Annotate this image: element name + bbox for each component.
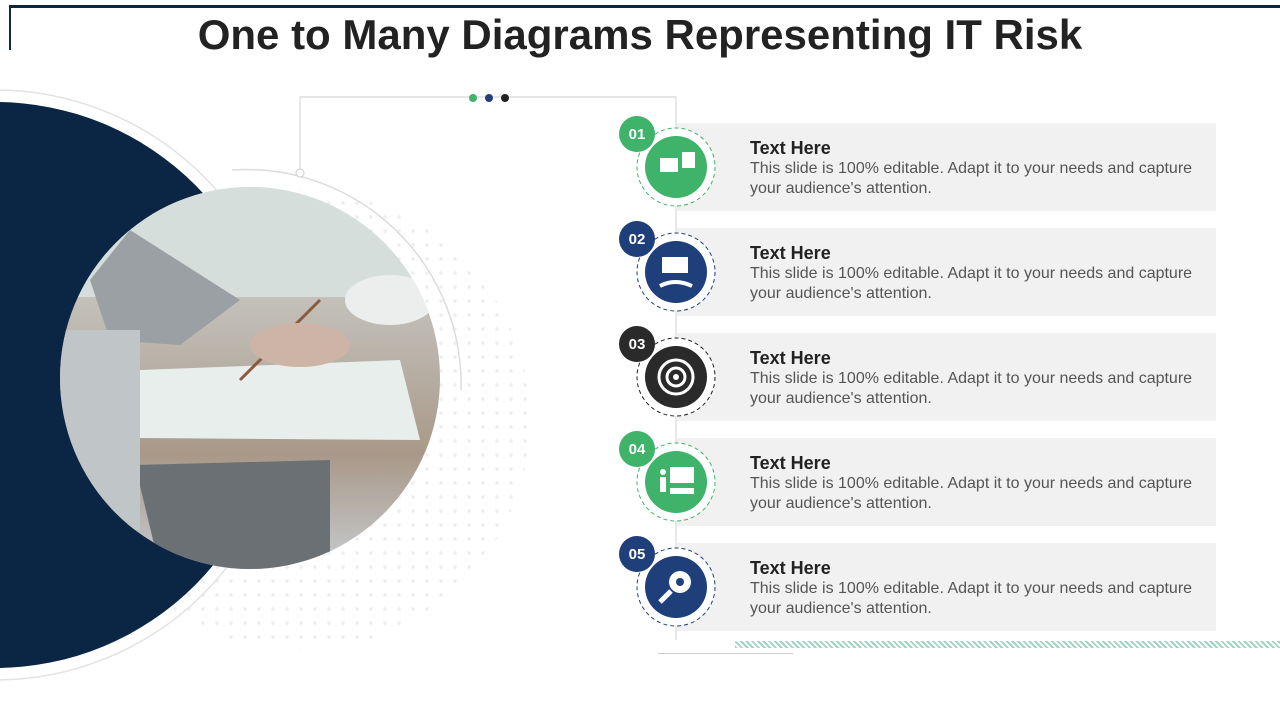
rows: Text Here — [750, 138, 831, 158]
title: One to Many Diagrams Representing IT Risk — [198, 11, 1082, 58]
rows — [677, 123, 1216, 211]
icon 3: 03 — [629, 336, 645, 353]
text: Text Here — [750, 558, 831, 578]
icon 3 — [619, 326, 715, 416]
left graphic — [0, 89, 676, 681]
text: This slide is 100% editable. Adapt it to your needs and capture your audience's attention. — [750, 370, 1192, 407]
icon 2 — [619, 221, 715, 311]
navy circle — [0, 102, 278, 668]
icon 2: 02 — [629, 231, 645, 248]
rows: This slide is 100% editable. Adapt it to your needs and capture your audience's attention. — [750, 160, 1192, 197]
icon 1: 01 — [629, 126, 645, 143]
text: This slide is 100% editable. Adapt it to your needs and capture your audience's attention. — [750, 475, 1192, 512]
icons — [619, 116, 716, 626]
icon 4 — [619, 431, 715, 521]
text: Text Here — [750, 453, 831, 473]
dotted background — [70, 190, 530, 650]
icon 5 — [619, 536, 715, 626]
connector line — [300, 97, 676, 640]
top-left corner bracket — [9, 5, 1280, 50]
icon 1 — [619, 116, 715, 206]
text: This slide is 100% editable. Adapt it to your needs and capture your audience's attention. — [750, 580, 1192, 617]
bottom hatched strip — [735, 641, 1280, 648]
text: Text Here — [750, 348, 831, 368]
photo — [60, 187, 440, 569]
text: Text Here — [750, 243, 831, 263]
icon 5: 05 — [629, 546, 645, 563]
icon 4: 04 — [629, 441, 646, 458]
text: This slide is 100% editable. Adapt it to your needs and capture your audience's attention. — [750, 265, 1192, 302]
